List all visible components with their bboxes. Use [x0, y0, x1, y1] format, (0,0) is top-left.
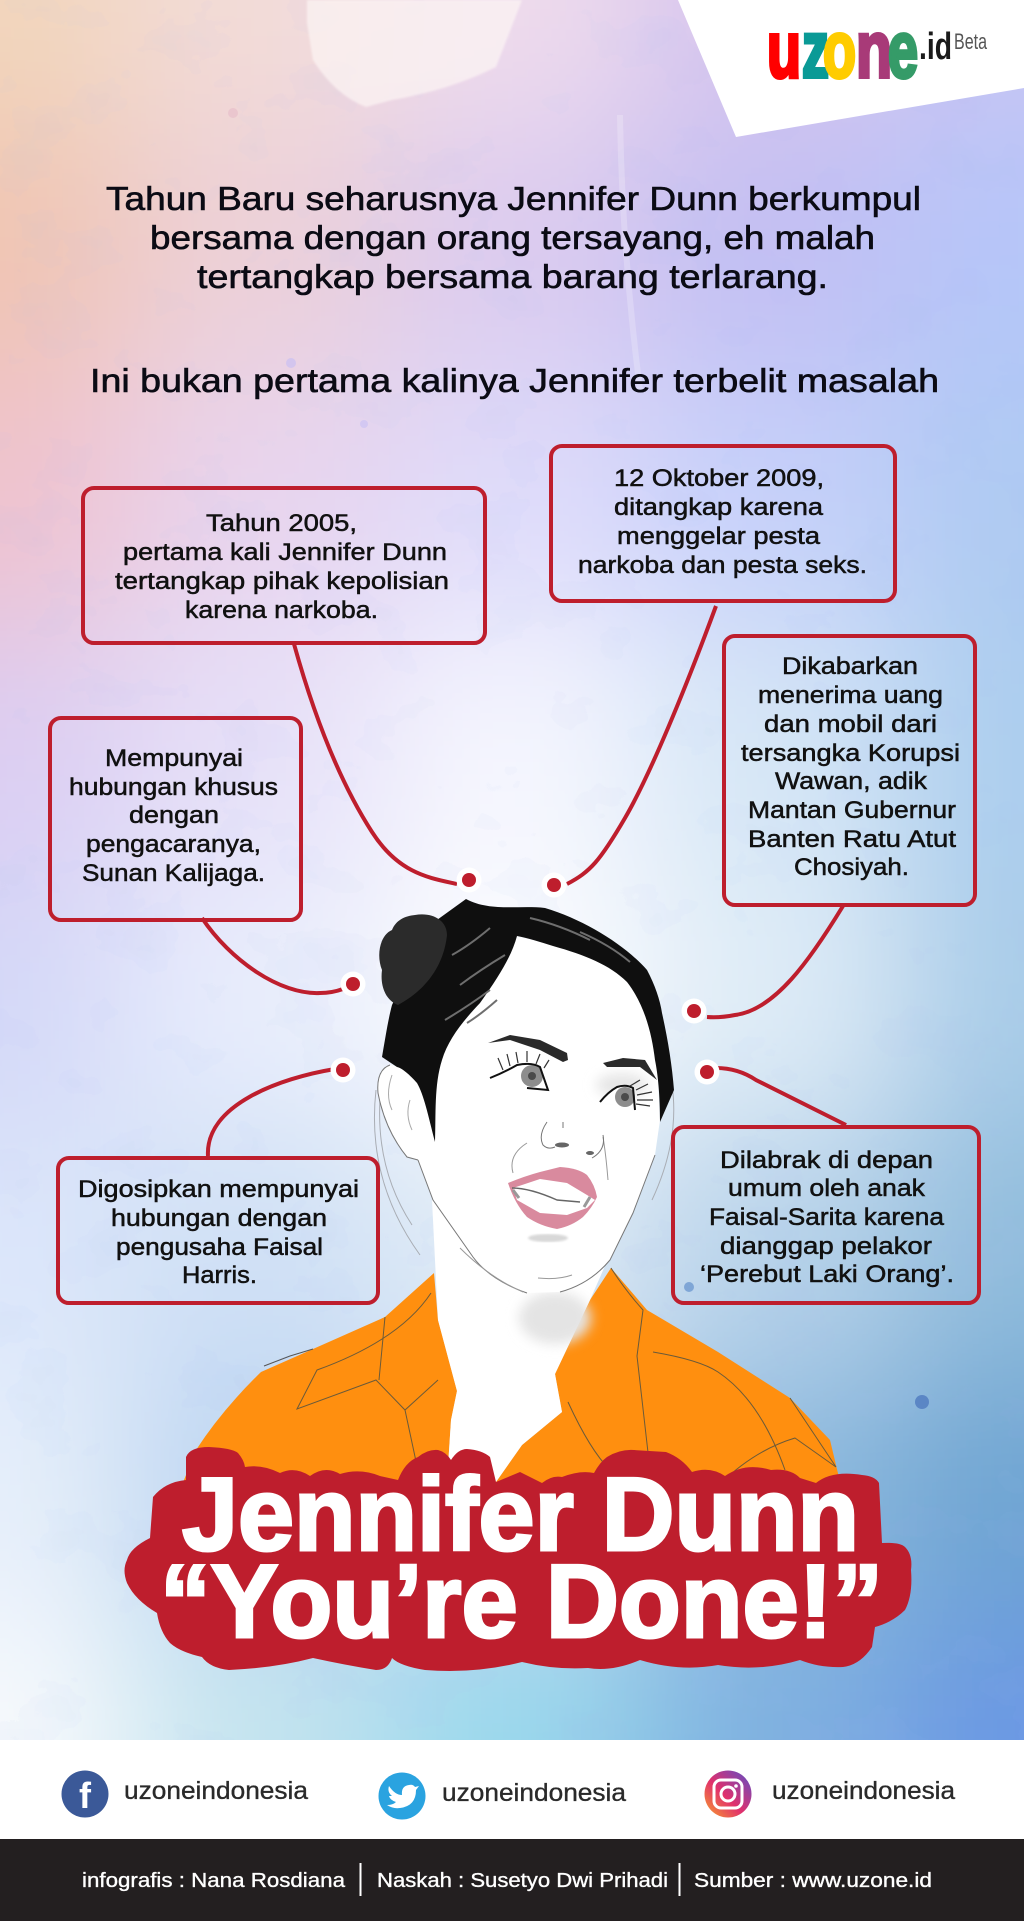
left eye	[490, 1051, 549, 1090]
neck	[432, 1200, 612, 1482]
logo: uzone.id Beta: .id	[919, 26, 952, 68]
right eye	[600, 1080, 653, 1110]
banner blob	[124, 1447, 911, 1671]
callout text: narkoba dan pesta seks.	[578, 552, 867, 579]
logo: uzone.id Beta: n	[856, 5, 892, 94]
logo: uzone.id Beta: o	[823, 5, 856, 94]
callout text	[700, 1147, 954, 1288]
callout text: Harris.	[182, 1262, 257, 1289]
twitter	[378, 1772, 426, 1820]
callout: Dilabrak	[673, 1127, 979, 1303]
callout text: umum oleh anak	[728, 1175, 926, 1202]
credits text	[82, 1870, 932, 1892]
logo: uzone.id Beta: z	[802, 5, 829, 94]
callout text: Tahun 2005,	[206, 510, 357, 537]
connector: Mempunyai callout to head	[202, 918, 366, 996]
callout text: tertangkap pihak kepolisian	[115, 568, 449, 595]
facebook handle: uzoneindonesia	[124, 1777, 308, 1805]
instagram handle: uzoneindonesia	[772, 1777, 955, 1805]
face shading	[528, 1073, 648, 1242]
intro text: bersama dengan orang tersayang, eh malah	[150, 219, 875, 256]
callout text: Chosiyah.	[794, 854, 909, 881]
left brow	[488, 1035, 568, 1062]
connector: Digosipkan callout to head	[208, 1058, 356, 1156]
callout: Dikabarkan	[724, 636, 975, 905]
callout text: pengacaranya,	[86, 831, 261, 858]
callout text: ditangkap karena	[614, 494, 824, 521]
callout text: Sunan Kalijaga.	[82, 860, 265, 887]
credits bar	[0, 1839, 1024, 1921]
callout: 12 Oktober 2009	[551, 446, 895, 601]
social bar	[0, 1740, 1024, 1840]
connector: Dilabrak callout to head	[694, 1060, 846, 1125]
callout text: menggelar pesta	[617, 523, 821, 550]
logo: uzone.id Beta: Beta	[954, 29, 988, 54]
right brow	[603, 1058, 657, 1080]
title banner	[124, 1447, 911, 1671]
callout text	[578, 465, 867, 579]
callout text: Mempunyai	[105, 745, 243, 772]
callout: Digosipkan	[58, 1158, 378, 1303]
callout text: dengan	[129, 802, 219, 829]
subheading: Ini bukan pertama kalinya Jennifer terbelit masalah	[90, 362, 939, 399]
callout text: Dilabrak di depan	[720, 1147, 933, 1174]
banner text	[160, 1457, 883, 1660]
callout text: pengusaha Faisal	[116, 1234, 323, 1261]
callout text: Digosipkan mempunyai	[78, 1176, 359, 1203]
callout text	[115, 510, 449, 624]
callout text: hubungan dengan	[111, 1205, 327, 1232]
callout text: hubungan khusus	[69, 774, 278, 801]
instagram	[704, 1770, 752, 1818]
hair	[379, 899, 674, 1142]
callout text	[741, 653, 960, 881]
callout text	[69, 745, 278, 887]
callout text: ‘Perebut Laki Orang’.	[700, 1261, 954, 1288]
credits text: Sumber : www.uzone.id	[694, 1870, 932, 1892]
callout text: Faisal-Sarita karena	[709, 1204, 945, 1231]
logo: uzone.id Beta	[767, 5, 988, 94]
callout text: tersangka Korupsi	[741, 740, 960, 767]
connector: 2005 callout to head	[294, 644, 482, 892]
neck shadow	[519, 1292, 591, 1344]
logo: uzone.id Beta: e	[888, 5, 918, 94]
callout text: Mantan Gubernur	[748, 797, 956, 824]
credits text: Naskah : Susetyo Dwi Prihadi	[377, 1870, 668, 1892]
connector: Dikabarkan callout to head	[682, 906, 843, 1024]
callout text: dan mobil dari	[764, 711, 937, 738]
credits text: infografis : Nana Rosdiana	[82, 1870, 346, 1892]
intro text: tertangkap bersama barang terlarang.	[197, 258, 828, 295]
callout text: Banten Ratu Atut	[748, 826, 956, 853]
callout text: Dikabarkan	[782, 653, 918, 680]
connector: 2009 callout to head	[542, 606, 716, 898]
intro text: Tahun Baru seharusnya Jennifer Dunn berkumpul	[106, 180, 921, 217]
intro text	[106, 180, 921, 295]
banner text: Jennifer Dunn	[182, 1457, 859, 1573]
callout: Mempunyai hubungan khusus	[50, 718, 301, 920]
face outline and creases	[378, 1065, 655, 1293]
logo: uzone.id Beta: u	[767, 5, 801, 94]
mouth	[508, 1167, 597, 1229]
callout text: karena narkoba.	[185, 597, 378, 624]
facebook	[62, 1770, 108, 1818]
face	[378, 937, 660, 1293]
banner text: “You’re Done!”	[160, 1544, 883, 1660]
logo panel	[678, 0, 1024, 137]
callout text: Wawan, adik	[775, 768, 928, 795]
shirt	[180, 1268, 842, 1490]
portrait illustration	[180, 899, 842, 1490]
callout text: pertama kali Jennifer Dunn	[123, 539, 447, 566]
nose	[541, 1122, 604, 1158]
callout text: menerima uang	[758, 682, 943, 709]
facebook: f	[79, 1775, 92, 1816]
callout text: dianggap pelakor	[720, 1233, 932, 1260]
callout text: 12 Oktober 2009,	[614, 465, 824, 492]
callout: Tahun 2005	[83, 488, 485, 643]
callout text	[78, 1176, 359, 1289]
twitter handle: uzoneindonesia	[442, 1779, 626, 1807]
side hair strands	[374, 1085, 674, 1255]
shirt lines	[264, 1268, 836, 1484]
